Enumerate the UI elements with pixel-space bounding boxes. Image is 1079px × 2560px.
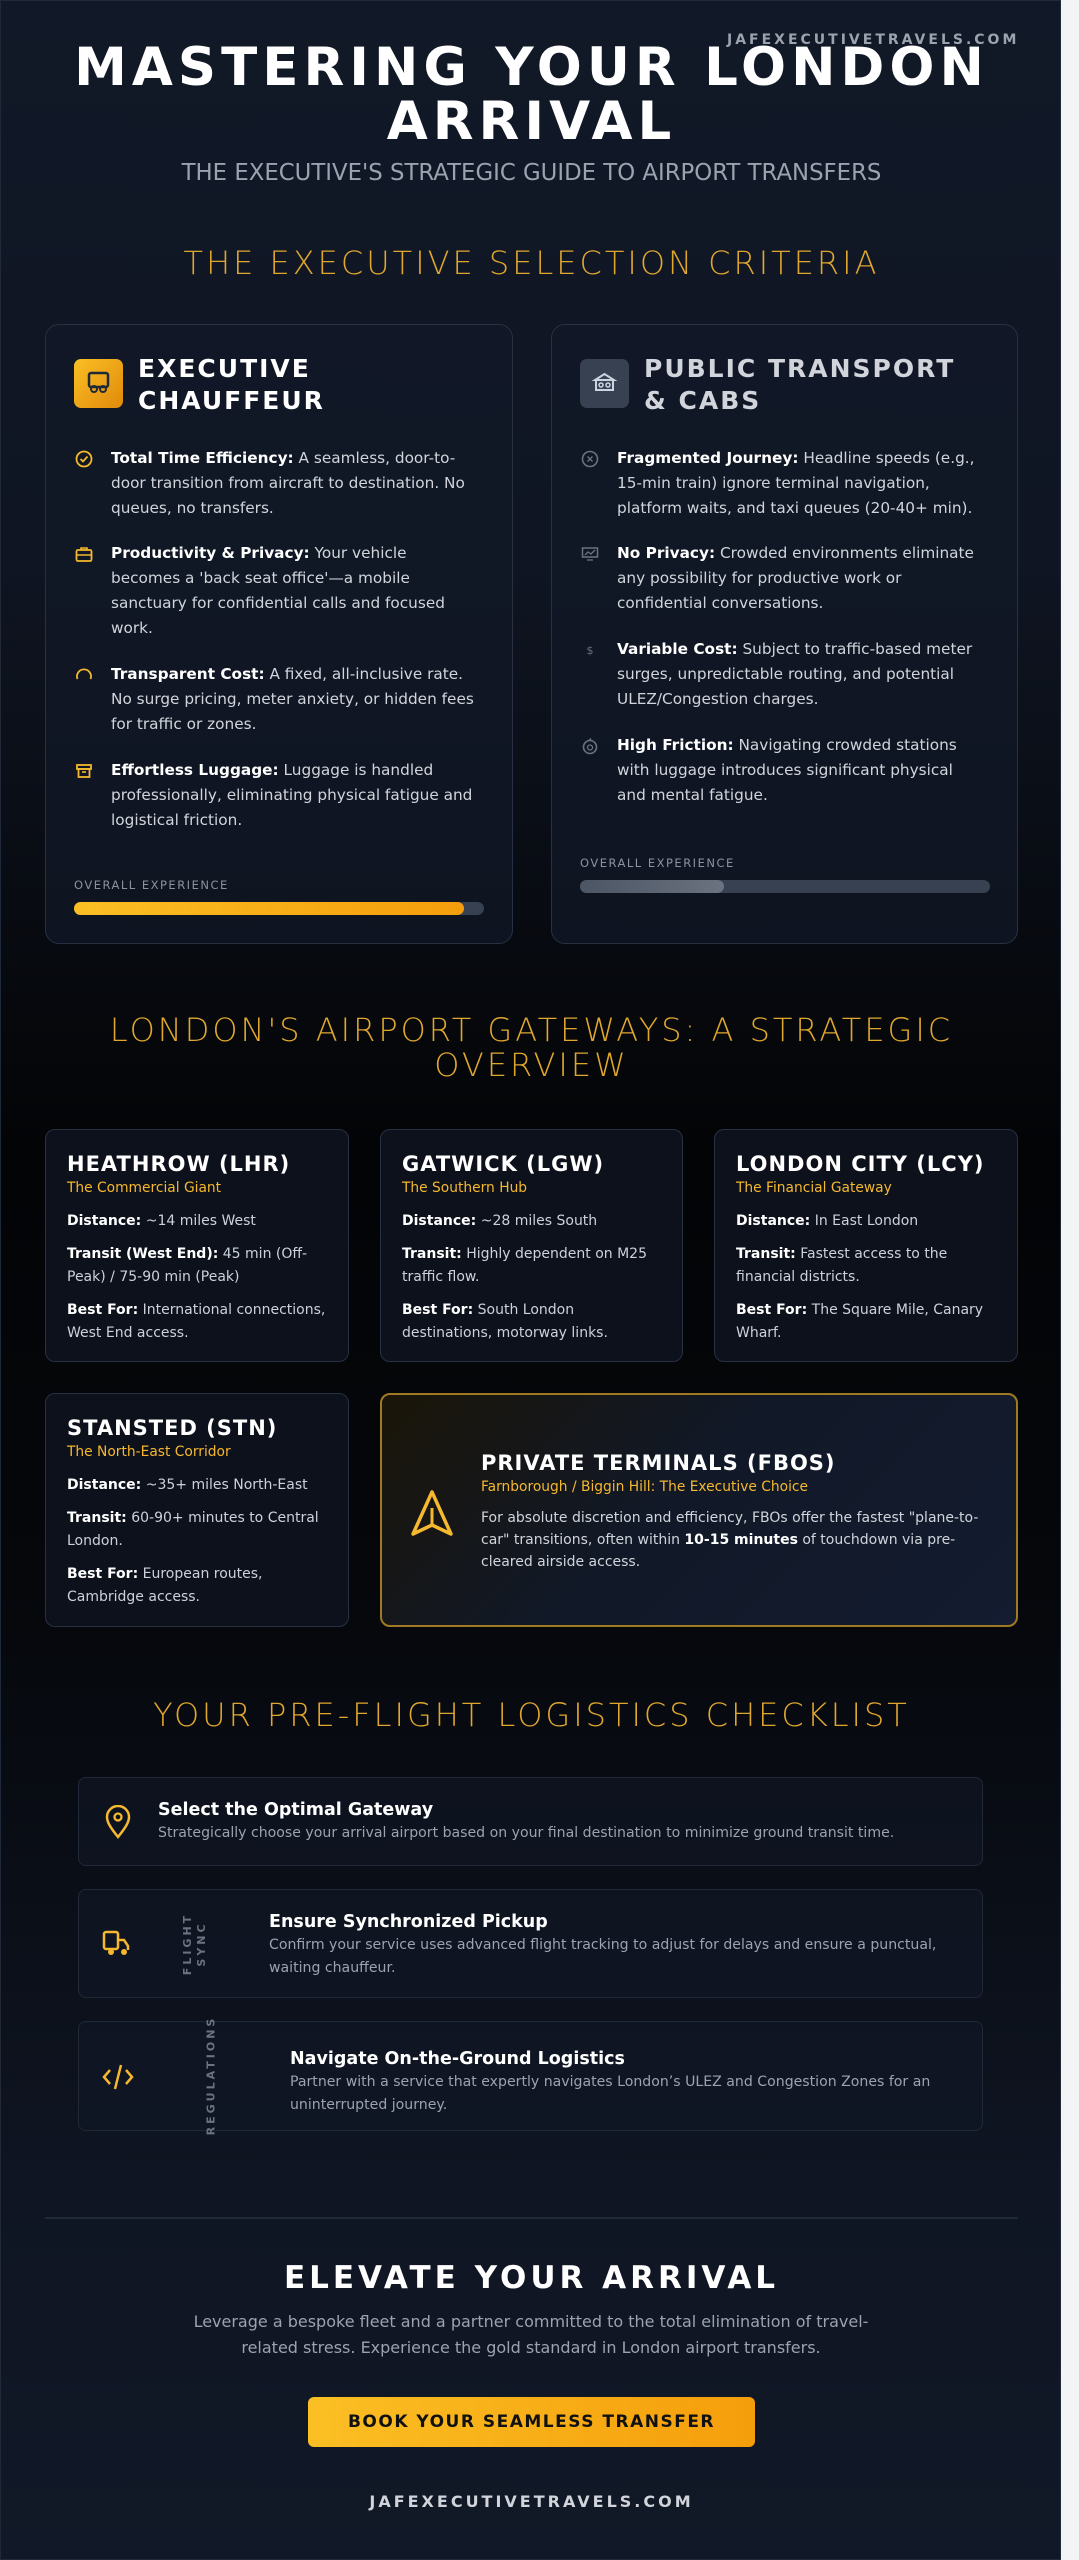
panel: gatwick: Best For: South London destinations, motorway links.: [402, 1302, 608, 1341]
checklist item 2: Ensure Synchronized Pickup: [269, 1912, 548, 1932]
panel: heathrow: Best For: International connections, West End access.: [67, 1302, 325, 1341]
panel: london city: LONDON CITY (LCY): [736, 1152, 984, 1176]
heading: [644, 354, 955, 415]
panel: london city: The Financial Gateway: [736, 1180, 892, 1196]
footer domain: JAFEXECUTIVETRAVELS.COM: [369, 2492, 694, 2511]
button: book: BOOK YOUR SEAMLESS TRANSFER: [348, 2412, 715, 2432]
panel: gatwick: Transit: Highly dependent on M25 traffic flow.: [402, 1246, 647, 1285]
panel: stansted: Transit: 60-90+ minutes to Central London.: [67, 1510, 319, 1549]
vertical label: flight sync: SYNC: [195, 1921, 208, 1967]
checklist item 3: Partner with a service that expertly navigates London’s ULEZ and Congestion Zones for an uninterrupted journey.: [290, 2074, 930, 2113]
vertical label: flight sync: [181, 1913, 208, 1975]
panel: london city: Transit: Fastest access to the financial districts.: [736, 1246, 947, 1285]
heading: CHAUFFEUR: [138, 386, 325, 415]
checklist item 1: [78, 1777, 983, 1866]
checklist item 2: [78, 1889, 983, 1998]
panel: heathrow: Distance: ~14 miles West: [67, 1213, 256, 1229]
item: fragmented journey: Fragmented Journey: Headline speeds (e.g., 15-min train) ignore terminal navigation, platform waits, and taxi queues (20-40+ min).: [617, 449, 975, 517]
panel: london city: Distance: In East London: [736, 1213, 918, 1229]
item: transparent cost: Transparent Cost: A fixed, all-inclusive rate. No surge pricing, meter anxiety, or hidden fees for traffic or zones.: [111, 665, 474, 733]
item: variable cost: Variable Cost: Subject to traffic-based meter surges, unpredictable routing, and potential ULEZ/Congestion charges.: [617, 640, 972, 708]
item: productivity: Productivity & Privacy: Your vehicle becomes a 'back seat office'—a mobile sanctuary for confidential calls and focused work.: [111, 544, 445, 637]
panel: gatwick: GATWICK (LGW): [402, 1152, 604, 1176]
panel: gatwick: Distance: ~28 miles South: [402, 1213, 597, 1229]
panel: stansted: Best For: European routes, Cambridge access.: [67, 1566, 263, 1605]
panel: heathrow: [45, 1129, 349, 1362]
closing heading: ELEVATE YOUR ARRIVAL: [284, 2260, 779, 2296]
item: variable cost: $: [586, 644, 594, 657]
checklist item 3: Navigate On-the-Ground Logistics: [290, 2049, 625, 2069]
section heading: selection criteria: THE EXECUTIVE SELECTION CRITERIA: [184, 244, 879, 282]
vertical label: flight sync: FLIGHT: [181, 1913, 194, 1975]
checklist item 1: Strategically choose your arrival airport based on your final destination to minimize ground transit time.: [158, 1825, 894, 1841]
section heading: checklist: YOUR PRE-FLIGHT LOGISTICS CHECKLIST: [153, 1696, 910, 1734]
checklist item 3: [78, 2021, 983, 2131]
heading: & CABS: [644, 386, 761, 415]
heading: [138, 354, 325, 415]
panel: london city: Best For: The Square Mile, Canary Wharf.: [736, 1302, 983, 1341]
panel: stansted: Distance: ~35+ miles North-East: [67, 1477, 308, 1493]
section heading: airport gateways: [110, 1011, 953, 1084]
panel: private terminals: [380, 1393, 1018, 1627]
item: no privacy: No Privacy: Crowded environments eliminate any possibility for productive work or confidential conversations.: [617, 544, 974, 612]
text block: [481, 1451, 978, 1570]
checklist item 2: Confirm your service uses advanced flight tracking to adjust for delays and ensure a punctual, waiting chauffeur.: [269, 1937, 936, 1976]
text block: For absolute discretion and efficiency, FBOs offer the fastest "plane-to-car" transitions, often within 10-15 minutes of touchdown via pre-cleared airside access.: [481, 1510, 978, 1570]
item: time efficiency: Total Time Efficiency: A seamless, door-to-door transition from aircraft to destination. No queues, no transfers.: [111, 449, 465, 517]
title: [74, 37, 989, 152]
label: overall experience: OVERALL EXPERIENCE: [74, 878, 229, 892]
panel: stansted: STANSTED (STN): [67, 1416, 277, 1440]
item: high friction: High Friction: Navigating crowded stations with luggage introduces significant physical and mental fatigue.: [617, 736, 957, 804]
icon: bus: [580, 359, 629, 408]
panel: heathrow: Transit (West End): 45 min (Off-Peak) / 75-90 min (Peak): [67, 1246, 307, 1285]
subtitle: THE EXECUTIVE'S STRATEGIC GUIDE TO AIRPORT TRANSFERS: [182, 160, 881, 186]
panel: stansted: [45, 1393, 349, 1627]
icon: car: [74, 359, 123, 408]
button: book: [308, 2397, 755, 2447]
icon: code brackets: [102, 2064, 134, 2090]
item: luggage: Effortless Luggage: Luggage is handled professionally, eliminating physical fatigue and logistical friction.: [111, 761, 472, 829]
panel: london city: [714, 1129, 1018, 1362]
section heading: airport gateways: LONDON'S AIRPORT GATEWAYS: A STRATEGIC: [110, 1011, 953, 1049]
icon: location pin: [106, 1805, 130, 1839]
closing paragraph: Leverage a bespoke fleet and a partner committed to the total elimination of travel-related stress. Experience the gold standard in London airport transfers.: [194, 2312, 868, 2357]
text block: PRIVATE TERMINALS (FBOS): [481, 1451, 836, 1475]
vertical label: regulations: REGULATIONS: [204, 2016, 218, 2135]
title: MASTERING YOUR LONDON: [74, 37, 989, 98]
panel: heathrow: The Commercial Giant: [67, 1180, 221, 1196]
icon: vehicle: [102, 1930, 130, 1955]
icon: warning triangle: [411, 1490, 453, 1536]
section heading: airport gateways: OVERVIEW: [434, 1046, 629, 1084]
panel: heathrow: HEATHROW (LHR): [67, 1152, 290, 1176]
heading: PUBLIC TRANSPORT: [644, 354, 955, 383]
text block: Farnborough / Biggin Hill: The Executive Choice: [481, 1479, 808, 1495]
panel: gatwick: [380, 1129, 683, 1362]
panel: public transport: [551, 324, 1018, 944]
checklist item 1: Select the Optimal Gateway: [158, 1800, 433, 1820]
panel: gatwick: The Southern Hub: [402, 1180, 527, 1196]
title: ARRIVAL: [387, 91, 676, 152]
domain top: JAFEXECUTIVETRAVELS.COM: [727, 32, 1019, 48]
bar: experience 35%: [580, 880, 990, 893]
panel: executive chauffeur: [45, 324, 513, 944]
bar: experience 95%: [74, 902, 484, 915]
label: overall experience: OVERALL EXPERIENCE: [580, 856, 735, 870]
panel: stansted: The North-East Corridor: [67, 1444, 231, 1460]
heading: EXECUTIVE: [138, 354, 311, 383]
